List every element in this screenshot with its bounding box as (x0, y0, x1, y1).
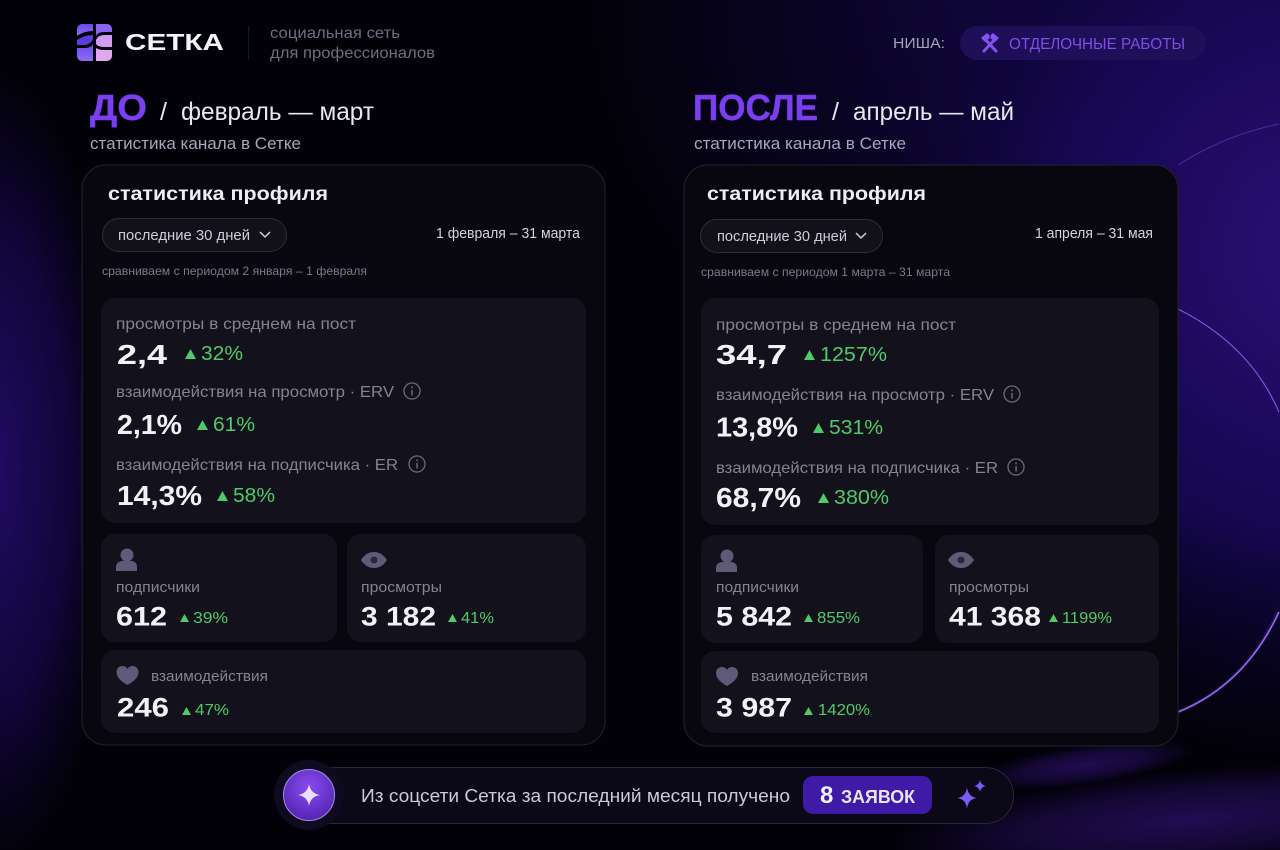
card: interactions: 1420% (818, 702, 870, 719)
icon: star orb (274, 760, 344, 830)
card: subscribers (101, 534, 337, 642)
card: interactions: взаимодействия (751, 668, 868, 685)
panel: before stats (82, 165, 605, 745)
tagline: для профессионалов (270, 45, 435, 62)
card: key metrics: взаимодействия на просмотр · ERV (116, 384, 394, 401)
icon: eye (361, 552, 387, 568)
callout: leads banner (274, 760, 1014, 830)
tagline: социальная сеть (270, 25, 400, 42)
icon: info (404, 383, 420, 399)
card: key metrics: просмотры в среднем на пост (716, 317, 957, 334)
card: key metrics: 380% (834, 487, 889, 509)
heading: after: / (832, 98, 839, 126)
icon: eye (948, 552, 974, 568)
card: key metrics: 68,7% (716, 482, 801, 513)
card: key metrics: просмотры в среднем на пост (116, 316, 357, 333)
card: key metrics: 32% (201, 343, 243, 365)
card: key metrics: 13,8% (716, 412, 798, 442)
date range: 1 апреля – 31 мая (1035, 226, 1153, 242)
subheading: before: статистика канала в Сетке (90, 135, 301, 153)
card: subscribers: 5 842 (716, 602, 792, 632)
comparison note: сравниваем с периодом 2 января – 1 февраля (102, 264, 367, 278)
card: subscribers: подписчики (116, 579, 200, 596)
card: interactions (101, 650, 586, 733)
card: views (935, 535, 1159, 643)
icon: heart (716, 667, 738, 686)
card: subscribers: 612 (116, 602, 167, 632)
highlight badge (803, 776, 932, 814)
heading: after: ПОСЛЕ (693, 87, 818, 128)
heading: before: / (160, 98, 167, 126)
heading: after: апрель — май (853, 98, 1014, 126)
subheading: after: статистика канала в Сетке (694, 135, 906, 153)
niche pill: ОТДЕЛОЧНЫЕ РАБОТЫ (1009, 36, 1185, 53)
icon: heart (116, 666, 138, 685)
niche pill (960, 26, 1206, 60)
period dropdown (102, 218, 286, 252)
card: views (347, 534, 586, 642)
card: views: просмотры (949, 579, 1029, 596)
card: views: 3 182 (361, 602, 436, 632)
period dropdown: последние 30 дней (717, 229, 847, 245)
card: views: 41% (461, 610, 494, 627)
heading: after (693, 87, 1014, 128)
heading: before (90, 87, 375, 128)
card: key metrics (701, 298, 1159, 525)
card: key metrics: 58% (233, 485, 275, 507)
date range: 1 февраля – 31 марта (436, 226, 581, 242)
card: key metrics: 531% (829, 417, 883, 439)
heading: before: ДО (90, 87, 147, 128)
card: key metrics: 2,4 (117, 339, 168, 370)
panel title: статистика профиля (707, 184, 926, 205)
period dropdown (700, 220, 882, 252)
card: interactions: взаимодействия (151, 668, 268, 685)
card: key metrics: взаимодействия на подписчика · ER (716, 460, 998, 477)
icon: Setka logo (77, 24, 112, 61)
niche label: НИША: (893, 35, 945, 52)
card: interactions: 3 987 (716, 692, 792, 722)
icon: info (1008, 459, 1024, 475)
highlight badge: 8 (820, 782, 833, 809)
banner text: Из соцсети Сетка за последний месяц получено (361, 785, 790, 806)
logo wordmark: СЕТКА (125, 29, 224, 55)
tagline (248, 25, 435, 62)
icon: person (716, 550, 737, 572)
card: key metrics: 61% (213, 414, 255, 436)
card: views: 1199% (1062, 610, 1112, 627)
card: key metrics: 34,7 (716, 339, 787, 370)
heading: before: февраль — март (181, 98, 375, 126)
card: key metrics: взаимодействия на просмотр · ERV (716, 387, 994, 404)
panel title: статистика профиля (108, 184, 328, 205)
comparison note: сравниваем с периодом 1 марта – 31 марта (701, 265, 950, 279)
card: key metrics: 2,1% (117, 409, 182, 440)
period dropdown: последние 30 дней (118, 228, 250, 244)
icon: person (116, 548, 137, 571)
highlight badge: ЗАЯВОК (841, 787, 916, 807)
icon: info (409, 456, 425, 472)
panel: after stats (684, 165, 1178, 746)
card: interactions (701, 651, 1159, 733)
card: interactions: 47% (195, 702, 229, 719)
card: subscribers (701, 535, 923, 643)
card: key metrics (101, 298, 586, 523)
card: subscribers: 855% (817, 610, 860, 627)
icon: info (1004, 386, 1020, 402)
card: key metrics: 14,3% (117, 480, 202, 511)
icon: hammers (981, 33, 999, 51)
card: key metrics: взаимодействия на подписчика · ER (116, 457, 398, 474)
card: subscribers: 39% (193, 610, 228, 627)
card: views: просмотры (361, 579, 442, 596)
card: interactions: 246 (117, 692, 169, 722)
card: key metrics: 1257% (820, 344, 887, 366)
logo (77, 24, 224, 61)
card: views: 41 368 (949, 602, 1041, 632)
icon: sparkles (957, 780, 986, 809)
card: subscribers: подписчики (716, 579, 799, 596)
